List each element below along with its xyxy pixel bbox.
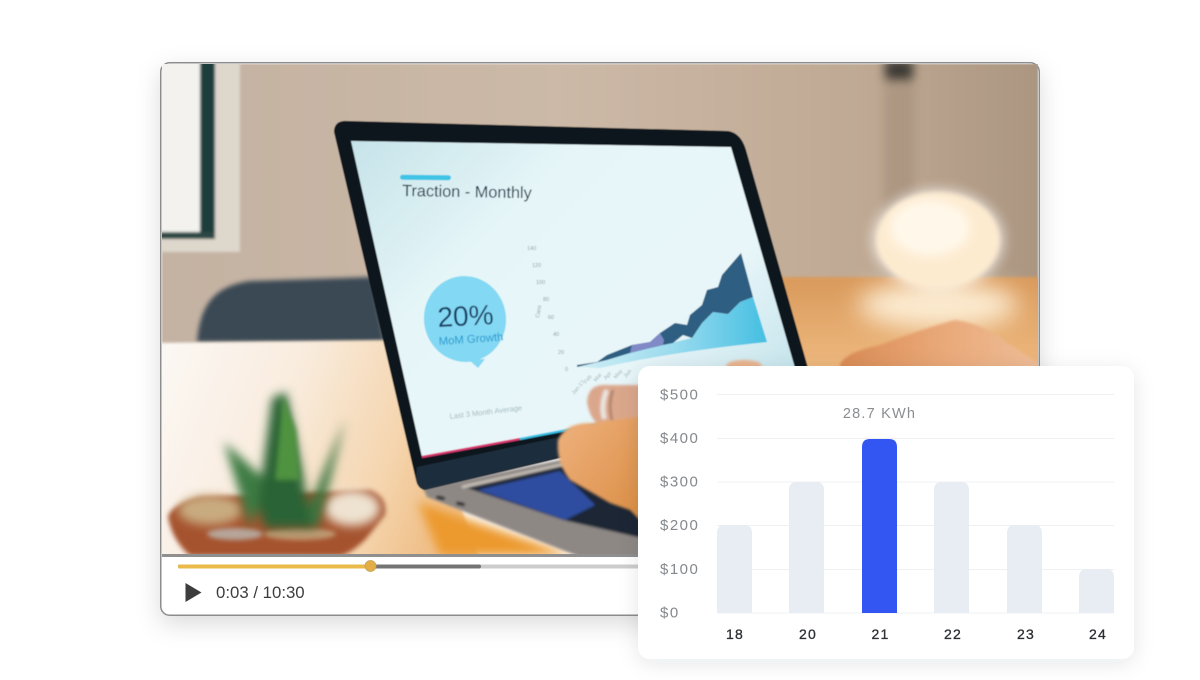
y axis labels: $100	[660, 561, 699, 578]
chart date labels: Jan-17	[571, 380, 586, 396]
x axis labels: 22	[944, 626, 962, 642]
chair	[197, 277, 385, 342]
hand on keyboard	[556, 383, 638, 521]
bar 22	[934, 482, 969, 613]
chart date labels: Jun	[623, 369, 633, 379]
chart date labels	[572, 369, 632, 395]
wall	[162, 64, 1038, 364]
left table	[150, 340, 480, 560]
laptop base	[423, 460, 650, 560]
chart axis labels: 60	[548, 315, 554, 321]
chart axis labels: 120	[532, 263, 541, 269]
chart date labels: Feb	[583, 374, 594, 385]
y axis labels: $400	[660, 430, 699, 447]
right table	[782, 276, 1038, 366]
bars	[717, 439, 1114, 613]
slide title: Traction - Monthly	[402, 182, 533, 202]
video bottom edge	[162, 554, 1038, 557]
x axis labels: 24	[1089, 626, 1107, 642]
y axis labels: $500	[660, 386, 699, 404]
growth bubble: 20%	[437, 299, 494, 333]
growth bubble	[424, 276, 506, 368]
y axis labels: $300	[660, 474, 699, 490]
progress knob	[365, 560, 376, 572]
hand at right	[839, 318, 1038, 366]
time readout: 0:03 / 10:30	[216, 583, 305, 602]
laptop lid	[334, 121, 820, 490]
grid lines	[717, 394, 1114, 613]
chart date labels: May	[613, 368, 624, 380]
plant leaves	[224, 392, 345, 528]
bar 21 highlighted	[862, 439, 897, 613]
chart date labels: Apr	[603, 371, 613, 381]
chart axis labels: 80	[543, 297, 549, 303]
chart axis labels	[527, 246, 568, 373]
x axis labels: 20	[799, 626, 817, 642]
card background	[638, 366, 1134, 659]
wall corner shadow	[878, 64, 920, 206]
chart axis labels: Cans	[535, 304, 543, 318]
laptop screen	[351, 141, 800, 457]
panel: video player	[150, 58, 1050, 615]
icon: play	[186, 583, 202, 602]
bar 20	[789, 482, 824, 613]
chart axis labels: 140	[527, 246, 536, 252]
slide caption: Last 3 Month Average	[449, 403, 523, 421]
chart axis labels: 0	[565, 367, 568, 373]
progress track	[178, 560, 658, 572]
slide accent bar	[400, 175, 451, 180]
area chart on screen	[577, 253, 767, 368]
laptop chin	[416, 437, 560, 490]
bar 23	[1007, 525, 1042, 613]
glowing lamp	[858, 187, 1018, 329]
bar 24	[1079, 569, 1114, 613]
player frame	[161, 63, 1039, 615]
infographic canvas	[152, 62, 1138, 668]
fingertip behind card	[724, 358, 764, 366]
growth bubble: MoM Growth	[438, 332, 504, 348]
video still: laptop on desk	[150, 58, 1050, 560]
chart axis labels: 40	[553, 332, 559, 338]
chart axis labels: 20	[558, 350, 564, 356]
window	[162, 64, 241, 253]
x axis labels	[726, 626, 1107, 642]
photo contents	[150, 58, 1050, 560]
bar 18	[717, 525, 752, 613]
x axis labels: 21	[872, 626, 889, 642]
chart axis labels: 100	[536, 280, 545, 286]
x axis labels: 18	[726, 626, 744, 642]
x axis labels: 23	[1017, 626, 1035, 642]
y axis labels: $200	[660, 517, 699, 534]
potted plant	[168, 392, 385, 556]
chart date labels: Mar	[593, 372, 604, 383]
y axis labels: $0	[660, 604, 680, 622]
value callout: 28.7 KWh	[843, 406, 916, 422]
panel: energy bar chart card	[638, 366, 1134, 659]
y axis labels	[660, 386, 699, 622]
